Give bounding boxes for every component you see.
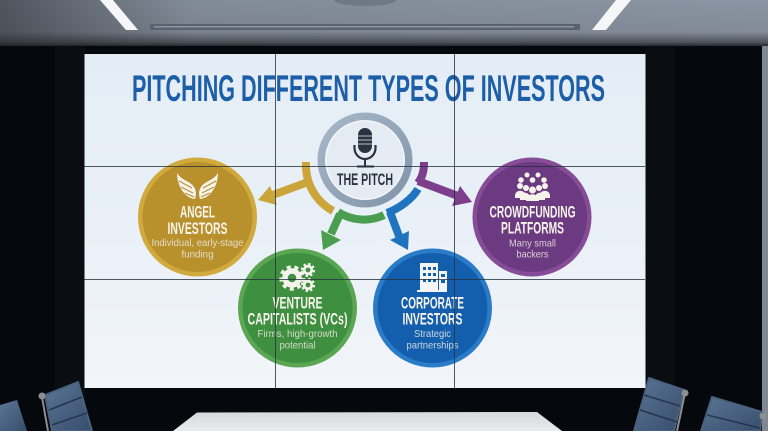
corporate description line 2: partnerships <box>406 340 458 352</box>
conference table <box>173 412 562 431</box>
icon: crowd of people <box>515 172 550 201</box>
panel: corporate investors <box>373 248 492 368</box>
corporate heading line 2: INVESTORS <box>402 310 462 328</box>
venture description line 2: potential <box>280 340 316 352</box>
central hub: the pitch <box>318 112 412 208</box>
chairs right <box>634 378 766 431</box>
icon: microphone <box>354 128 376 168</box>
corporate description: Strategic <box>414 328 451 340</box>
arrow: green to venture capitalists <box>321 212 384 250</box>
icon: gears <box>281 264 314 291</box>
arrow: purple to crowdfunding platforms <box>418 162 472 206</box>
chairs left <box>0 382 92 431</box>
venture description: Firms, high-growth <box>258 328 338 340</box>
angel description line 2: funding <box>182 248 214 260</box>
hub label: THE PITCH <box>337 170 393 189</box>
arrow: blue to corporate investors <box>387 189 418 250</box>
panel: venture capitalists <box>238 248 357 368</box>
angel heading line 2: INVESTORS <box>168 219 228 238</box>
corporate heading: CORPORATE <box>401 294 464 312</box>
icon: angel wings <box>177 173 218 199</box>
venture heading line 2: CAPITALISTS (VCs) <box>248 310 348 328</box>
angel description: Individual, early-stage <box>152 237 244 249</box>
panel: angel investors <box>138 158 257 276</box>
venture heading: VENTURE <box>272 294 322 312</box>
icon: office building <box>417 263 447 292</box>
crowdfunding description: Many small <box>509 238 556 250</box>
ceiling <box>0 0 768 47</box>
crowdfunding heading: CROWDFUNDING <box>490 202 576 222</box>
video wall screen <box>84 54 646 388</box>
angel heading: ANGEL <box>180 202 215 222</box>
arrow: gold to angel investors <box>258 162 333 211</box>
panel: crowdfunding platforms <box>472 158 592 276</box>
crowdfunding description line 2: backers <box>516 248 548 260</box>
crowdfunding heading line 2: PLATFORMS <box>501 218 564 238</box>
